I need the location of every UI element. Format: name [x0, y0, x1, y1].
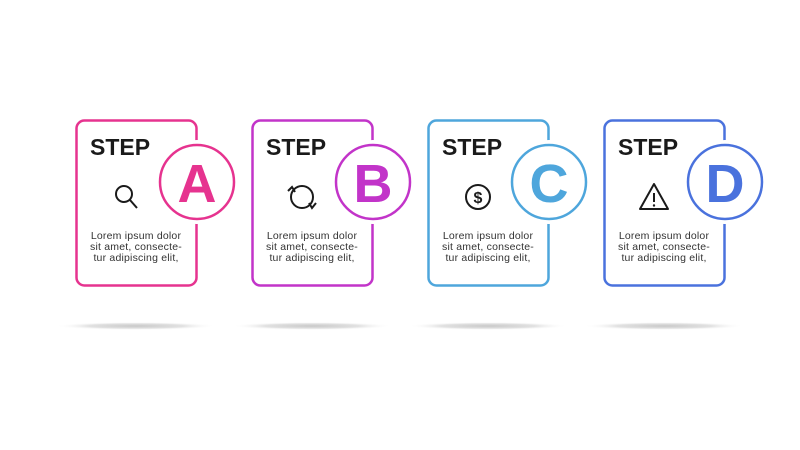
body text: tur adipiscing elit,	[621, 252, 707, 264]
icon: dollar coin: $	[474, 190, 483, 207]
heading: STEP	[266, 134, 326, 160]
shadow	[408, 322, 568, 330]
card: step D	[584, 120, 767, 330]
body text: sit amet, consecte-	[618, 241, 710, 253]
card frame	[604, 120, 724, 286]
body text: tur adipiscing elit,	[93, 252, 179, 264]
card frame	[252, 120, 372, 286]
letter badge	[683, 140, 767, 224]
icon: dollar coin	[466, 185, 490, 209]
letter badge: C	[530, 154, 568, 214]
body text: tur adipiscing elit,	[269, 252, 355, 264]
icon: warning	[640, 184, 668, 209]
body text: Lorem ipsum dolor	[267, 230, 357, 242]
shadow	[56, 322, 216, 330]
letter badge: D	[706, 154, 744, 214]
card: step C	[408, 120, 591, 330]
card: step B	[232, 120, 415, 330]
body text: Lorem ipsum dolor	[91, 230, 181, 242]
card frame	[76, 120, 196, 286]
letter badge: B	[354, 154, 392, 214]
shadow	[584, 322, 744, 330]
letter badge: A	[178, 154, 216, 214]
body text: sit amet, consecte-	[90, 241, 182, 253]
letter badge	[507, 140, 591, 224]
shadow	[232, 322, 392, 330]
heading: STEP	[618, 134, 678, 160]
letter badge	[155, 140, 239, 224]
body text: sit amet, consecte-	[266, 241, 358, 253]
body text: sit amet, consecte-	[442, 241, 534, 253]
card frame	[428, 120, 548, 286]
icon: magnifier	[116, 186, 137, 208]
heading: STEP	[90, 134, 150, 160]
letter badge	[331, 140, 415, 224]
body text: tur adipiscing elit,	[445, 252, 531, 264]
card: step A	[56, 120, 239, 330]
body text: Lorem ipsum dolor	[619, 230, 709, 242]
icon: refresh	[288, 186, 316, 208]
heading: STEP	[442, 134, 502, 160]
body text: Lorem ipsum dolor	[443, 230, 533, 242]
